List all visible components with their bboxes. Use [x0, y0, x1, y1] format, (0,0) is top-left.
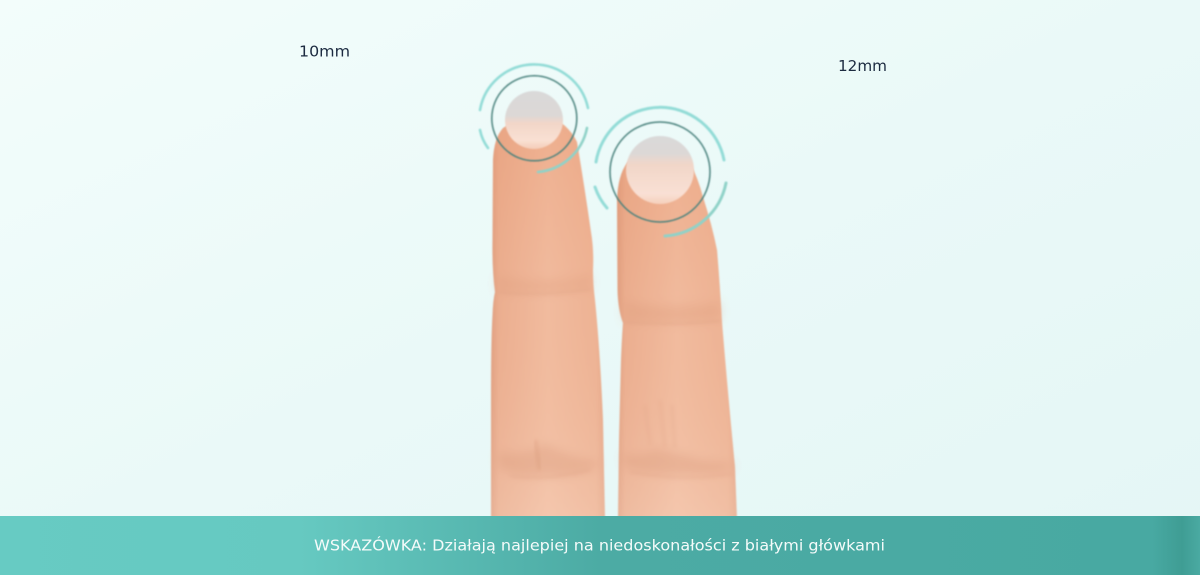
right nail: [626, 136, 694, 204]
banner text: WSKAZÓWKA: Działają najlepiej na niedoskonałości z białymi główkami: [314, 536, 885, 554]
rings: 10mm: [480, 64, 588, 172]
fingers illustration: [491, 91, 737, 520]
left nail: [505, 91, 563, 149]
rings: 12mm: [595, 107, 726, 236]
left finger: [491, 118, 605, 520]
label: 12mm: 12mm: [838, 57, 887, 75]
label: 10mm: 10mm: [299, 42, 350, 60]
right finger: [617, 150, 737, 520]
tip banner: [0, 516, 1200, 575]
